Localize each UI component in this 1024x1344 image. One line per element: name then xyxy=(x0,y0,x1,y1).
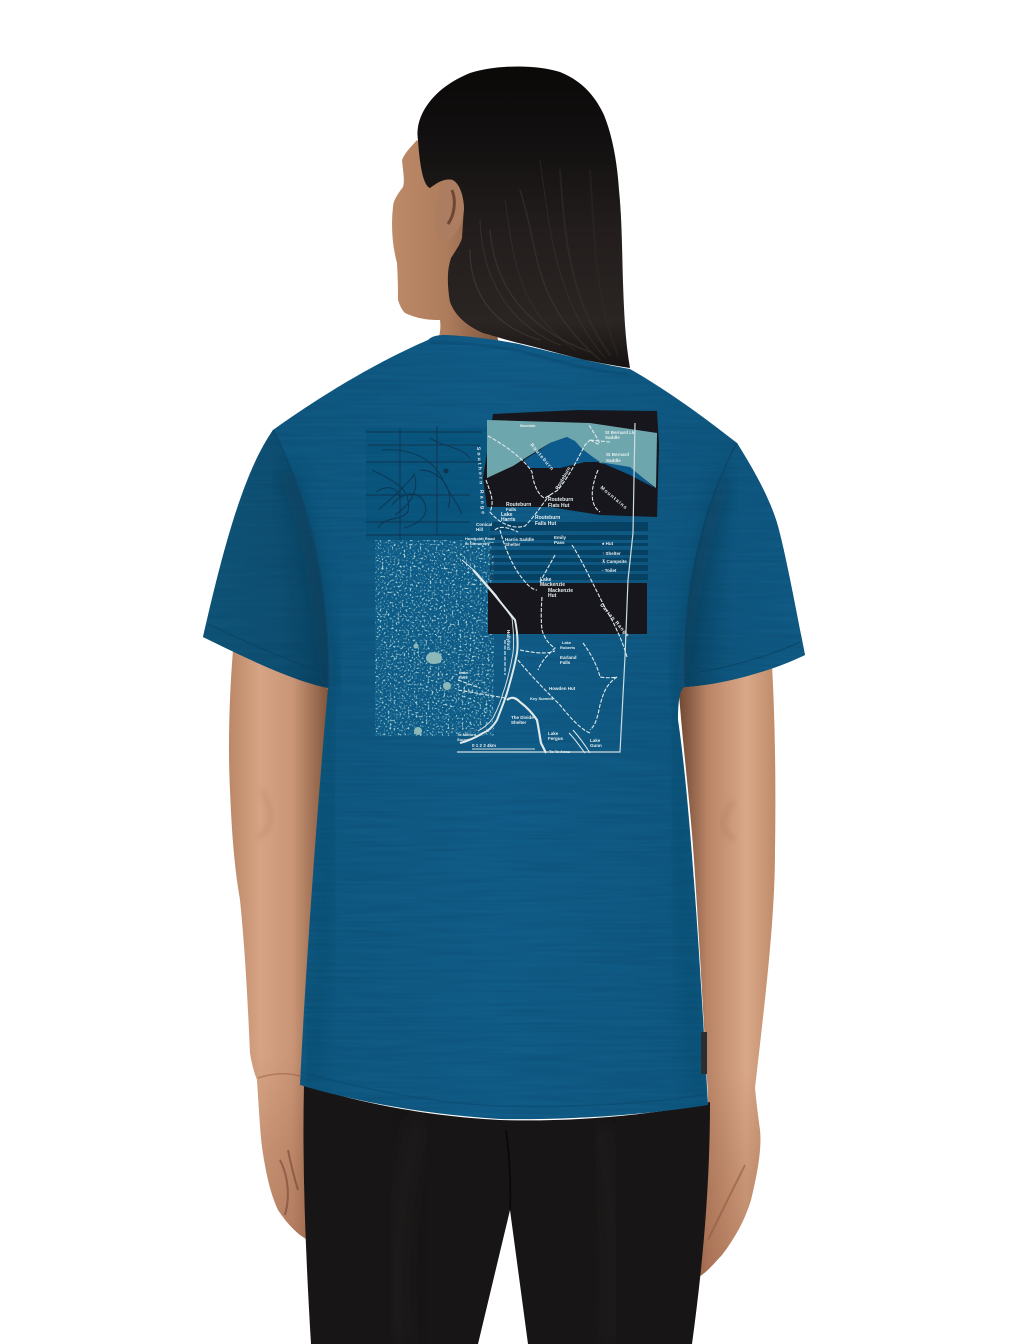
map labels: Southern Range xyxy=(475,447,486,516)
map labels: Lake xyxy=(501,512,513,518)
map labels: Falls xyxy=(506,507,517,512)
map labels: Howden Hut xyxy=(549,686,576,691)
river: main white road xyxy=(460,570,518,743)
map labels: Shelter xyxy=(505,542,521,547)
back print: map graphic xyxy=(366,410,659,754)
trousers xyxy=(303,1085,710,1344)
map labels: Earland xyxy=(560,655,577,660)
map labels xyxy=(457,424,635,754)
map labels: Routeburn xyxy=(548,497,573,503)
map frame lines xyxy=(457,423,635,752)
dark contour map panel xyxy=(366,426,488,540)
map labels: Sound xyxy=(457,737,470,742)
map labels: Mountains xyxy=(599,485,629,511)
map labels: Darran Range xyxy=(598,602,630,639)
map labels: Lake xyxy=(540,577,552,583)
map labels: to Glenorchy xyxy=(465,541,490,546)
pale sky panel xyxy=(487,420,657,488)
map labels: To Te Anau xyxy=(549,749,571,754)
map labels: Roberts xyxy=(560,645,576,650)
map labels: Conical xyxy=(476,522,492,527)
map labels: Falls xyxy=(560,660,571,665)
map labels: Saddle xyxy=(606,458,621,463)
hand: left xyxy=(250,1053,312,1240)
map labels: St Bernard xyxy=(606,452,629,457)
map labels: Routeburn xyxy=(506,502,531,508)
map labels: The Divide xyxy=(511,715,534,720)
map labels: Hollyford xyxy=(506,630,511,650)
map labels: Saddle xyxy=(605,435,620,440)
speckled satellite panel xyxy=(375,540,494,736)
black lower band xyxy=(488,583,647,634)
arm: left xyxy=(229,650,332,1240)
map labels: Gunn xyxy=(590,743,602,748)
map labels: To Milford xyxy=(457,732,477,737)
map labels: Routeburn xyxy=(535,515,560,521)
map labels: Rere xyxy=(459,675,469,680)
map labels: Lake xyxy=(562,640,572,645)
map labels: Lake xyxy=(590,738,601,743)
map labels: ⊼ Campsite xyxy=(602,559,627,564)
hand: right xyxy=(697,1070,760,1278)
map labels: Mackenzie xyxy=(548,588,573,594)
map labels: Shelter xyxy=(511,720,527,725)
head side and neck xyxy=(392,140,500,350)
map labels: ↑ Shelter xyxy=(602,551,621,556)
map labels: St Bernard Lk xyxy=(605,430,635,435)
map labels: Flats Hut xyxy=(548,503,570,509)
side label tag xyxy=(701,1032,707,1074)
map labels: Lake xyxy=(548,731,559,736)
trail: dashed white routes xyxy=(458,425,627,733)
shirt body and sleeves xyxy=(203,335,805,1119)
arm: right xyxy=(678,665,775,1278)
t-shirt xyxy=(200,330,810,1120)
hair shine strands xyxy=(470,160,618,360)
map labels: Hill xyxy=(476,527,483,532)
fabric texture and folds xyxy=(200,330,810,1120)
map labels: Key Summit xyxy=(530,696,554,701)
hair xyxy=(417,66,630,368)
ear xyxy=(434,180,464,243)
map labels: Emily xyxy=(554,535,567,540)
map labels: Humboldt Road xyxy=(465,536,495,541)
map labels: Mountain xyxy=(520,424,536,428)
map labels: - Toilet xyxy=(602,568,617,573)
map labels: 0 1 2 3 4km xyxy=(472,743,496,748)
map labels: Falls Hut xyxy=(535,521,556,527)
map labels: ♠ Hut xyxy=(602,541,614,546)
map labels: Routeburn xyxy=(555,466,572,491)
map labels: Routeburn xyxy=(528,442,555,473)
map labels: Mackenzie xyxy=(540,582,565,588)
map labels: Pass xyxy=(554,540,565,545)
right sleeve xyxy=(684,443,805,687)
striped dark band xyxy=(490,522,648,580)
product photo: man from behind wearing map-print tee xyxy=(203,66,805,1344)
map labels: Lake xyxy=(459,670,469,675)
blue mountain peak xyxy=(524,437,655,488)
left sleeve xyxy=(203,430,328,688)
map labels: Harris Saddle xyxy=(505,537,535,542)
map labels: Harris xyxy=(501,517,516,523)
map labels: Hut xyxy=(548,593,557,599)
black mountain band xyxy=(483,410,659,517)
map labels: Fergus xyxy=(548,736,564,741)
